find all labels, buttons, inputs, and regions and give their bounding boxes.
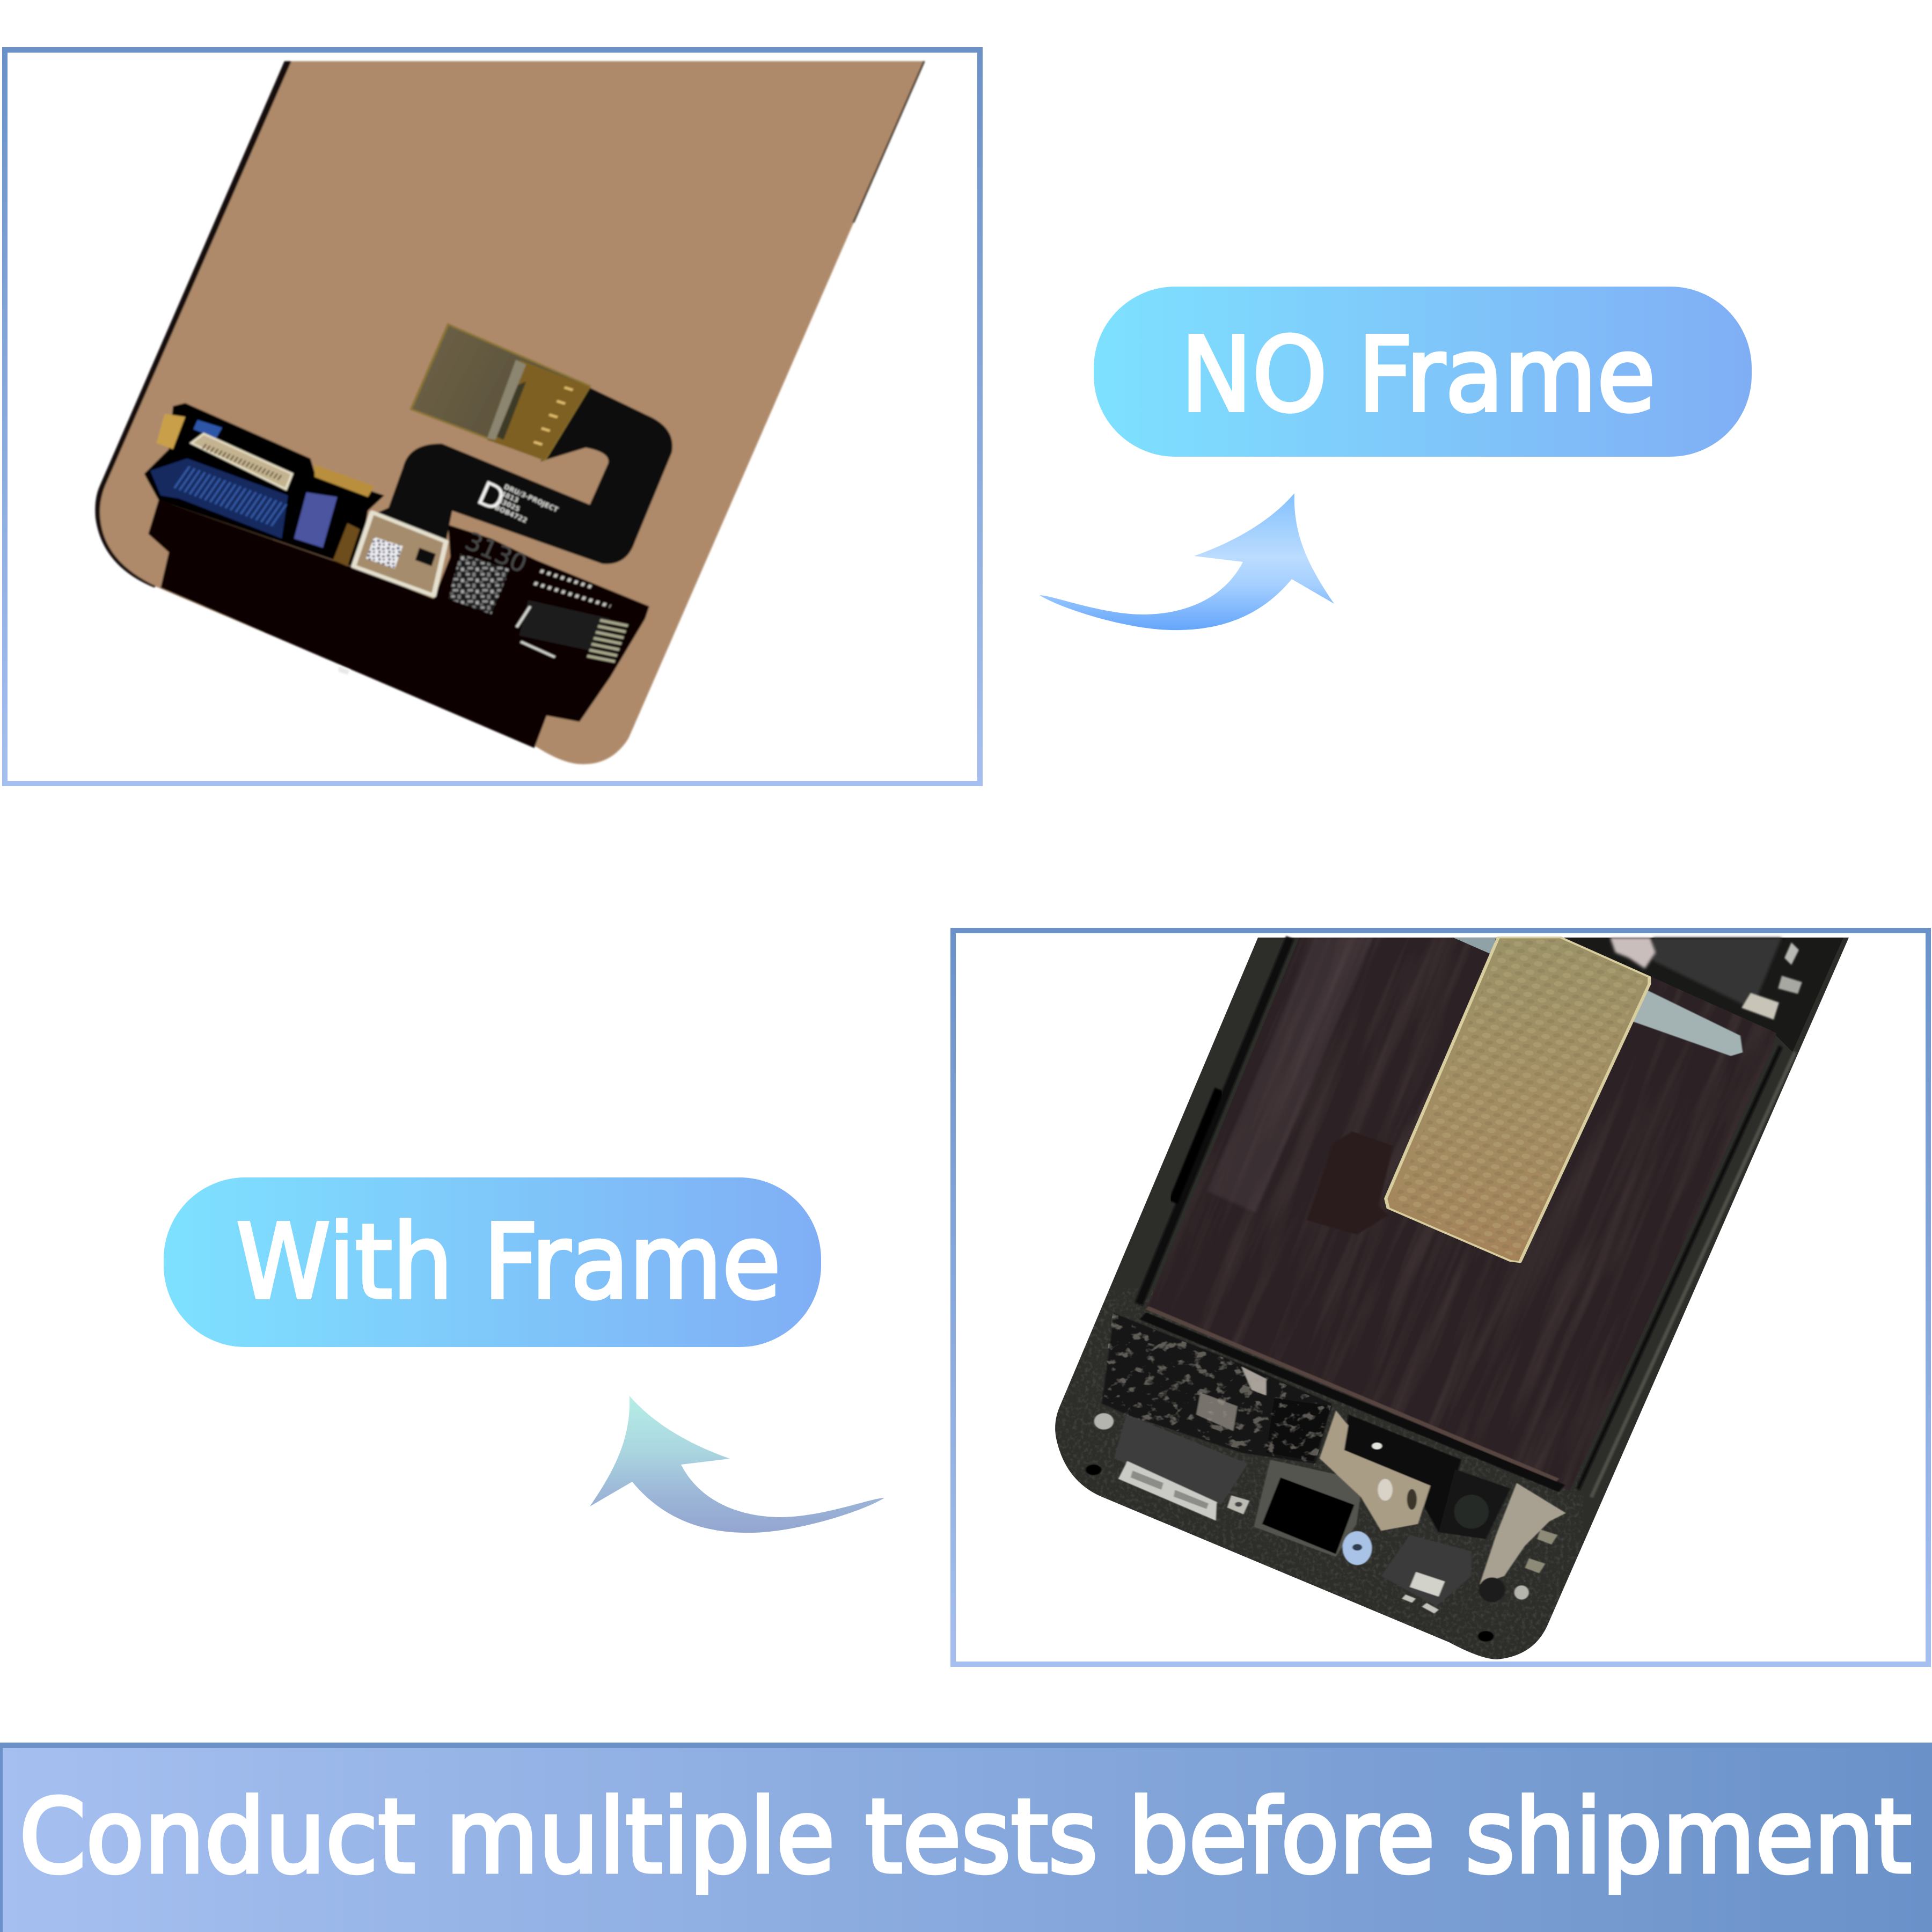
dark screw	[1479, 1577, 1505, 1602]
chip number: 3130	[460, 526, 531, 579]
black area above bracket	[1344, 1415, 1461, 1532]
gold pad	[157, 414, 185, 449]
shield dark window	[415, 548, 436, 566]
divider shadow	[1143, 1316, 1562, 1488]
copper screen back	[97, 61, 924, 764]
gold shield sticker	[1386, 938, 1649, 1262]
phone screen without frame	[95, 61, 924, 764]
arrow: curved teal pointing up to With Frame	[590, 1396, 884, 1533]
white square	[1410, 1572, 1445, 1597]
pill: With Frame	[164, 1177, 821, 1347]
screw left	[1094, 1413, 1114, 1430]
light screw	[1514, 1585, 1529, 1600]
purple connector	[294, 492, 337, 548]
pill background	[1094, 287, 1752, 457]
grey plate under chip	[1254, 1460, 1363, 1557]
black chip	[1262, 1477, 1355, 1554]
lower screw hole	[1478, 1631, 1494, 1642]
connector slot left	[1131, 1470, 1163, 1490]
edge notch	[339, 667, 349, 675]
divider rail	[1147, 1308, 1558, 1480]
right IC	[519, 600, 610, 651]
metal tab	[1241, 1366, 1266, 1395]
connector slot right	[1174, 1490, 1209, 1509]
flex small print: BOB4722	[494, 503, 529, 524]
fingerprint sensor	[411, 325, 590, 460]
banner fill	[3, 1748, 1932, 1932]
camera lens	[1454, 1495, 1489, 1528]
arrow: curved blue pointing up to NO Frame	[1040, 493, 1334, 630]
clip center	[1235, 1502, 1242, 1507]
black lower band	[148, 500, 649, 748]
cluttered highlight texture	[1103, 1313, 1331, 1465]
banner border	[0, 1743, 1932, 1932]
connector teeth	[204, 446, 282, 479]
second top right chip	[1741, 993, 1779, 1020]
black plate center-left	[1266, 1398, 1332, 1461]
metal shield can	[354, 513, 446, 596]
top right screw	[1784, 942, 1799, 965]
sensor gold contacts	[536, 387, 569, 446]
white dot	[1372, 1443, 1382, 1450]
right rail black line	[1578, 1046, 1781, 1489]
pill background	[164, 1177, 821, 1347]
blue screw	[1343, 1531, 1372, 1565]
bottom board area	[1086, 1308, 1566, 1642]
grey plate	[1114, 1415, 1248, 1505]
pill: NO Frame	[1094, 287, 1752, 457]
grey lower plate	[1381, 1535, 1472, 1606]
IC marking dots	[535, 571, 610, 606]
right pad column	[600, 621, 614, 662]
panel border	[5, 50, 980, 784]
right rail highlight	[1591, 1052, 1795, 1497]
sensor dark recess	[491, 382, 526, 440]
IC side mark	[517, 606, 555, 657]
blue pins	[181, 477, 280, 515]
panel border	[953, 931, 1928, 1664]
upper right textured plate	[1653, 938, 1782, 1009]
inner panel streaks	[1174, 938, 1769, 1489]
blue pin board	[150, 458, 288, 538]
gold contact strip	[314, 465, 374, 497]
gold sticker area	[1307, 938, 1743, 1262]
grey chip block	[1196, 1393, 1238, 1431]
bracket hole	[1378, 1479, 1393, 1501]
silver bar lower	[1626, 984, 1743, 1056]
blue screw center	[1352, 1544, 1362, 1550]
shield QR sticker	[366, 537, 403, 569]
left rail black slot	[1139, 938, 1290, 1304]
sensor metal lip	[487, 360, 526, 440]
flex letter D: D	[472, 473, 511, 519]
small square clip	[1227, 1495, 1250, 1514]
dark glue pad	[1307, 1131, 1393, 1234]
silver bar upper	[1453, 938, 1496, 954]
connector strip	[192, 434, 292, 489]
bottom rim screw hole	[1086, 1465, 1101, 1475]
flex small print: 4813	[500, 489, 520, 504]
copper tab	[333, 523, 360, 566]
S-shaped black flex cable	[368, 387, 672, 564]
camera module	[1439, 1469, 1511, 1539]
metal frame body	[1055, 938, 1849, 1659]
upper right dark area	[1563, 938, 1843, 1052]
top white bracket	[1610, 938, 1656, 969]
dark right edge	[853, 61, 924, 223]
upper-left highlight streak	[1208, 938, 1374, 1213]
metal bracket	[1320, 1410, 1430, 1531]
left side key slot	[1173, 1089, 1219, 1202]
frame grain	[1046, 1288, 1583, 1674]
bracket slot	[1407, 1489, 1417, 1510]
top right chip	[1778, 976, 1802, 994]
pill label: NO Frame	[1181, 316, 1656, 435]
panel: no frame photo	[5, 50, 980, 784]
inner panel dark wood	[1147, 938, 1776, 1491]
banner	[0, 1743, 1932, 1932]
white connector	[1118, 1461, 1217, 1521]
right metal bracket	[1480, 1483, 1566, 1584]
contact pad upper	[1537, 1529, 1558, 1545]
pill label: With Frame	[236, 1203, 781, 1322]
flex and board assembly	[144, 325, 672, 748]
sensor gold end	[487, 360, 590, 460]
panel: with frame photo	[950, 928, 1931, 1667]
grey QR code	[448, 554, 510, 614]
white small marks	[1404, 1597, 1437, 1612]
top-left black board	[144, 403, 384, 566]
contact pad lower	[1525, 1558, 1546, 1574]
blue mark	[193, 420, 222, 438]
flex small print: 43025	[496, 496, 521, 513]
phone screen with frame	[1055, 935, 1849, 1659]
left cluttered components	[1102, 1313, 1332, 1464]
sticker dimples	[1393, 940, 1644, 1258]
flex small print: DRU/3-PROJECT	[503, 482, 560, 514]
dark left edge	[95, 61, 291, 588]
